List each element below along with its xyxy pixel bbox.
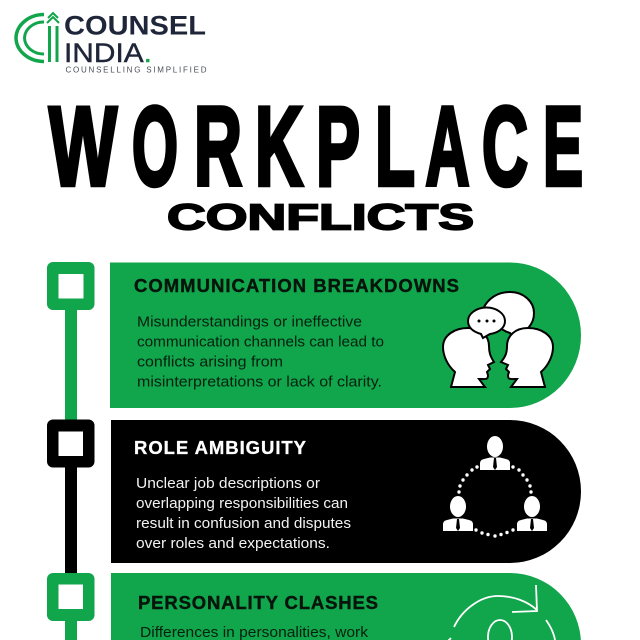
body text — [137, 314, 384, 390]
marker 1 — [47, 262, 94, 310]
subtitle: CONFLICTS: CONFLICTS — [167, 196, 474, 238]
connector green — [65, 300, 77, 425]
title: WORKPLACE: A — [426, 84, 470, 209]
heading: PERSONALITY CLASHES — [138, 592, 378, 613]
title: WORKPLACE: L — [375, 84, 415, 209]
heading: ROLE AMBIGUITY — [134, 437, 307, 458]
marker 3 — [47, 573, 94, 621]
dotted ring — [457, 465, 533, 538]
panel background — [111, 420, 581, 563]
icon: three people in a dotted circle — [443, 436, 547, 538]
icon: two heads talking — [443, 292, 553, 387]
body text: misinterpretations or lack of clarity. — [137, 374, 382, 390]
title: WORKPLACE: K — [255, 84, 303, 209]
title: WORKPLACE: O — [132, 84, 178, 209]
panel: personality clashes — [111, 573, 581, 640]
panel: role ambiguity — [111, 420, 581, 563]
connector green lower — [65, 610, 77, 640]
title: WORKPLACE: E — [543, 84, 583, 209]
title: WORKPLACE: C — [482, 84, 528, 209]
logo mark — [16, 13, 59, 62]
title: WORKPLACE: W — [49, 84, 117, 209]
speech dots — [478, 320, 496, 322]
logo: Counsel India: INDIA . — [64, 38, 152, 68]
body text: over roles and expectations. — [136, 535, 330, 552]
person top — [480, 436, 510, 470]
title: WORKPLACE: R — [194, 84, 242, 209]
body text — [136, 475, 351, 552]
big speech bubble — [483, 292, 534, 338]
person right — [517, 496, 547, 531]
body text: overlapping responsibilities can — [136, 495, 348, 512]
small speech bubble — [468, 308, 505, 338]
logo tagline: COUNSELLING SIMPLIFIED — [66, 66, 207, 74]
connector black — [65, 460, 77, 580]
body text: result in confusion and disputes — [136, 515, 351, 532]
panel background — [111, 573, 581, 640]
title: WORKPLACE: P — [316, 84, 360, 209]
icon: cycle arrows with person — [448, 585, 555, 640]
logo wordmark: COUNSEL — [64, 10, 206, 40]
left head — [443, 328, 494, 387]
timeline — [47, 262, 94, 640]
body text: Misunderstandings or ineffective — [137, 314, 362, 330]
panel: communication breakdowns — [110, 262, 581, 408]
right head — [501, 328, 553, 387]
logo: Counsel India — [16, 10, 207, 74]
body text: communication channels can lead to — [137, 334, 384, 350]
heading: COMMUNICATION BREAKDOWNS — [134, 275, 459, 296]
body text: conflicts arising from — [137, 354, 283, 370]
person left — [443, 496, 473, 531]
marker 2 — [47, 420, 94, 468]
body text: Unclear job descriptions or — [136, 475, 320, 492]
panel background — [110, 262, 581, 408]
